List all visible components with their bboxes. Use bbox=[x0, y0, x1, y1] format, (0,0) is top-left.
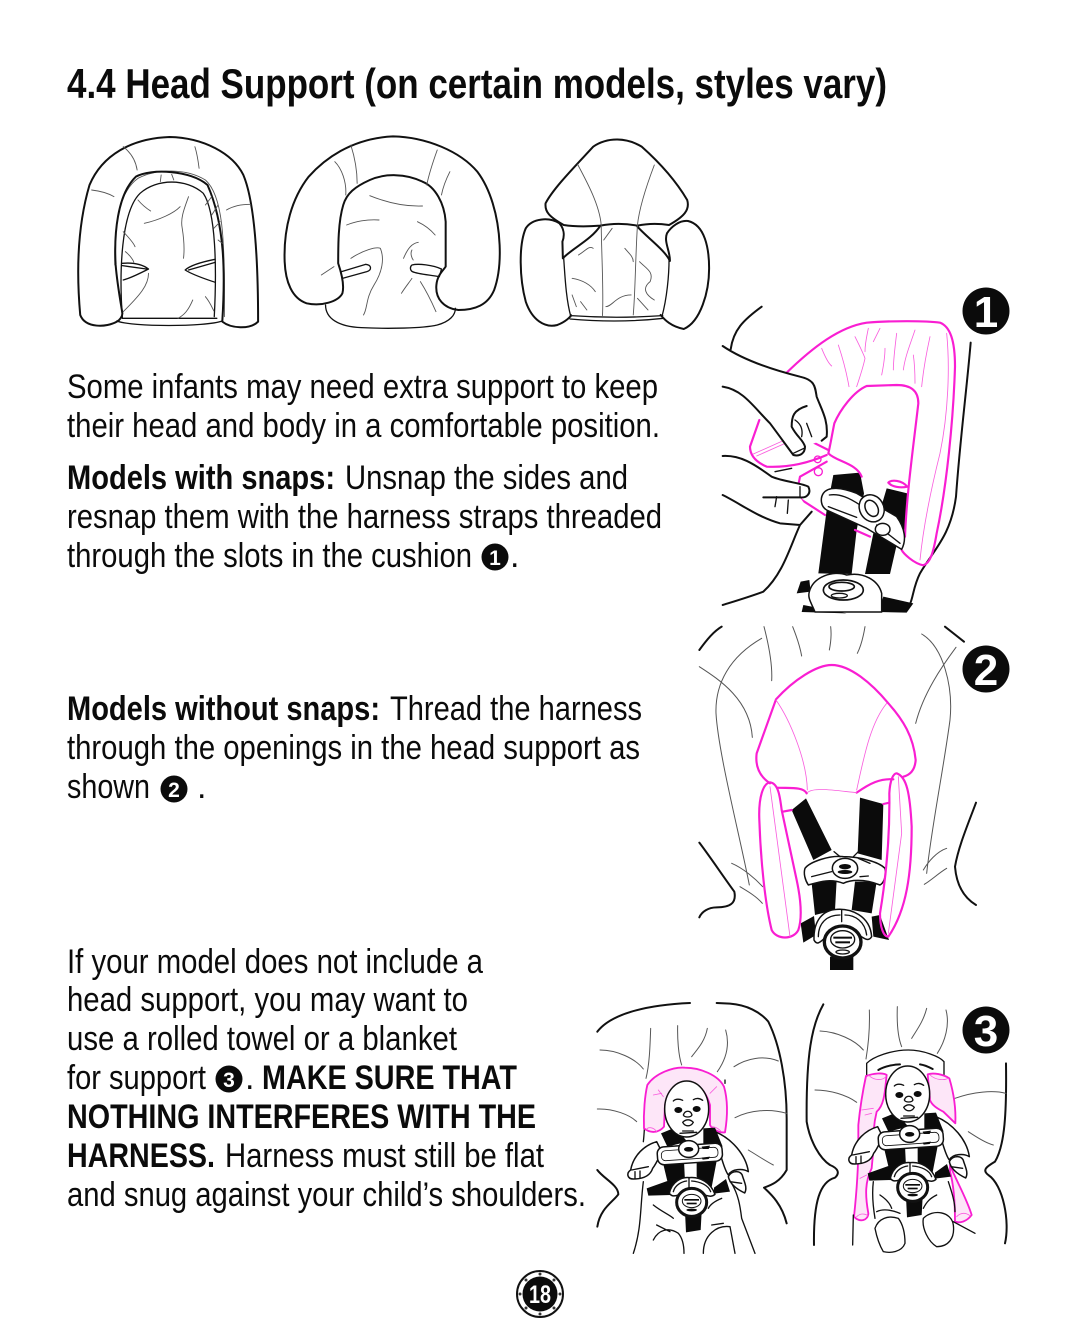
illustration: three head support cushions bbox=[78, 136, 709, 329]
text block: rolled towel advice: MAKE SURE THAT bbox=[262, 1059, 517, 1097]
number badge: 3 bbox=[962, 1006, 1010, 1056]
text block: models without snaps: Models without snaps: bbox=[67, 690, 380, 728]
text block: rolled towel advice: Harness must still be flat bbox=[225, 1137, 544, 1175]
text block: intro: their head and body in a comfortable position. bbox=[67, 407, 660, 445]
text block: rolled towel advice: head support, you may want to bbox=[67, 981, 468, 1019]
text block: models without snaps bbox=[67, 690, 642, 806]
text block: models without snaps: through the openings in the head support as bbox=[67, 729, 640, 767]
page number badge bbox=[517, 1271, 563, 1317]
text block: rolled towel advice: NOTHING INTERFERES WITH THE bbox=[67, 1098, 536, 1136]
illustration: step 1 hands snapping support bbox=[723, 307, 971, 613]
text block: models with snaps: resnap them with the harness straps threaded bbox=[67, 498, 662, 536]
text block: rolled towel advice: use a rolled towel or a blanket bbox=[67, 1020, 457, 1058]
number badge: 1 bbox=[962, 288, 1010, 337]
number badge: 1: 1 bbox=[974, 288, 998, 337]
text block: models without snaps: Thread the harness bbox=[390, 690, 642, 728]
text block: models without snaps: . bbox=[197, 768, 206, 806]
text block: rolled towel advice: for support bbox=[67, 1059, 206, 1097]
text block: models with snaps bbox=[67, 459, 662, 575]
number badge: 3: 3 bbox=[974, 1007, 998, 1056]
cushion: second style bbox=[285, 136, 500, 328]
text block: models with snaps: 1 bbox=[489, 547, 501, 570]
text block: rolled towel advice bbox=[67, 943, 586, 1214]
text block: rolled towel advice: and snug against your child’s shoulders. bbox=[67, 1176, 586, 1214]
text block: rolled towel advice: . bbox=[245, 1059, 254, 1097]
text block: rolled towel advice: HARNESS. bbox=[67, 1137, 215, 1175]
number badge: 2 bbox=[962, 646, 1010, 695]
text block: models without snaps: shown bbox=[67, 768, 150, 806]
illustration: step 3 rolled towels bbox=[597, 1003, 1007, 1253]
baby with towels at both sides bbox=[807, 1004, 1007, 1252]
illustration: step 2 threading harness bbox=[699, 627, 976, 970]
text block: models without snaps: 2 bbox=[168, 779, 180, 802]
title: 4.4 Head Support (on certain models, styles vary) bbox=[67, 60, 887, 107]
text block: intro bbox=[67, 368, 660, 445]
number badge: 2: 2 bbox=[974, 646, 998, 695]
text block: models with snaps: through the slots in the cushion bbox=[67, 537, 472, 575]
text block: models with snaps: Models with snaps: bbox=[67, 459, 335, 497]
baby with towel around head bbox=[597, 1003, 787, 1253]
text block: models with snaps: Unsnap the sides and bbox=[345, 459, 628, 497]
text block: rolled towel advice: 3 bbox=[223, 1069, 235, 1092]
text block: models with snaps: . bbox=[510, 537, 519, 575]
cushion: first style bbox=[78, 137, 258, 327]
page number badge: 18 bbox=[529, 1281, 551, 1309]
text block: intro: Some infants may need extra support to keep bbox=[67, 368, 658, 406]
text block: rolled towel advice: If your model does not include a bbox=[67, 943, 483, 981]
cushion: third style bbox=[521, 140, 709, 329]
